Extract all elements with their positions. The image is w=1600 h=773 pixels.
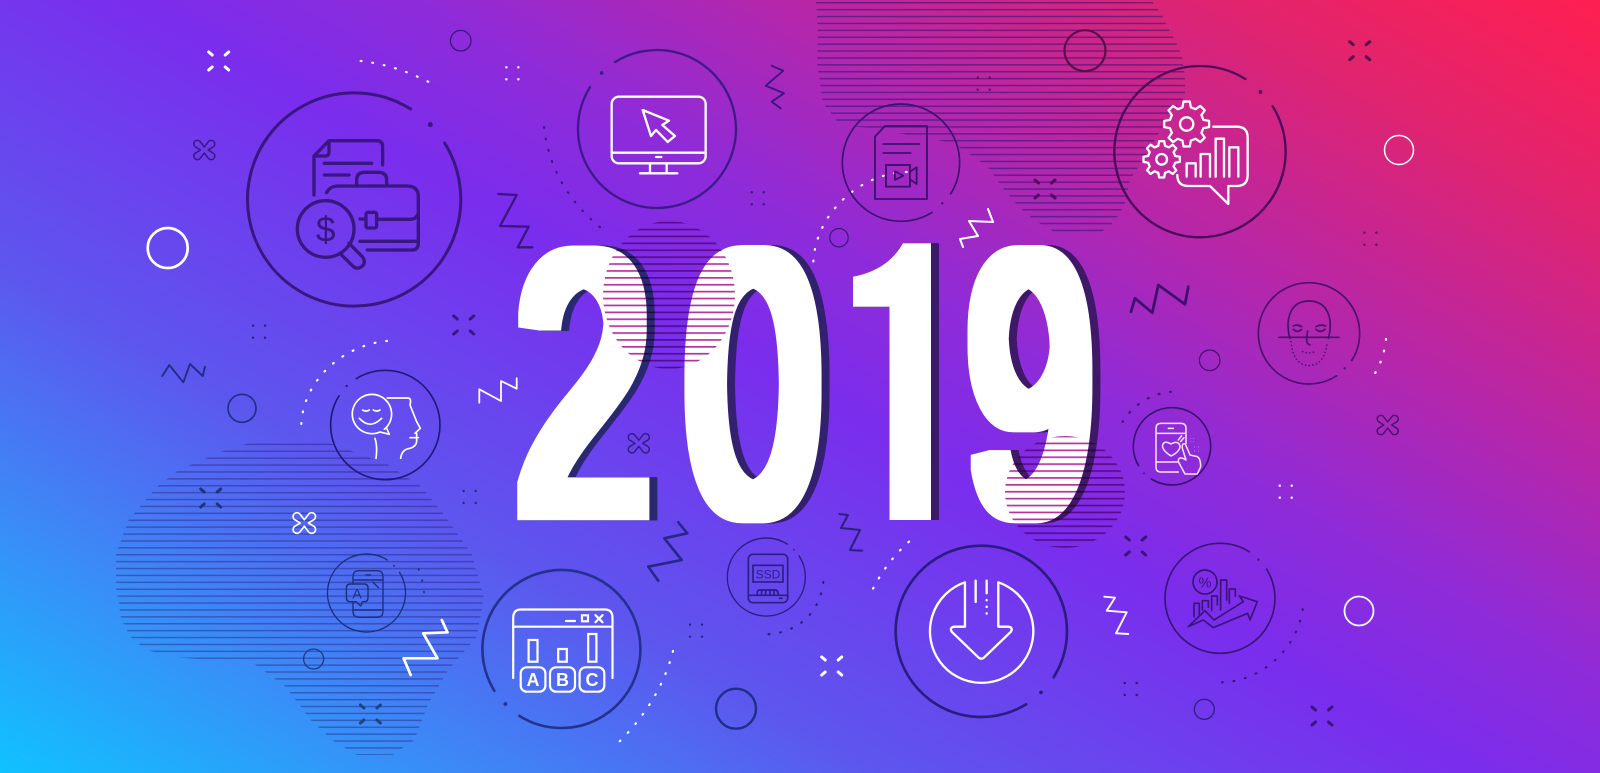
scattered marks: small x <box>253 67 1376 695</box>
icon: SSD drive: SSD <box>756 568 781 582</box>
hatched blob: top right <box>816 0 1185 235</box>
icon: smiling speech bubble and head profile <box>310 350 461 500</box>
icon: ABC window chart: B <box>556 670 569 690</box>
icon: briefcase with dollar magnifier <box>207 53 501 346</box>
icon: ABC window chart <box>453 540 670 758</box>
icon: face scan <box>1239 263 1379 403</box>
big numerals 2019 <box>517 243 1100 524</box>
dotted arcs <box>301 61 1386 744</box>
icon: gears and bar chart bubble <box>1082 34 1318 270</box>
scattered marks: big x <box>201 42 1370 725</box>
scattered small circles <box>148 30 1414 729</box>
digit 1 <box>853 243 939 520</box>
zigzag decorations <box>162 66 1188 675</box>
digit 2: 2 <box>515 176 651 592</box>
scattered marks: clover crosses <box>194 140 1398 533</box>
icon: phone translate <box>313 539 420 647</box>
icon: SSD drive <box>712 523 820 631</box>
icon: ABC window chart: C <box>586 670 598 690</box>
icon: phone with heart and pointing hand <box>1119 394 1225 499</box>
digit 1: 1 <box>838 176 974 592</box>
digit 0: 0 <box>685 176 821 592</box>
icon: monitor with cursor <box>548 20 766 238</box>
hatch overlay on 2 and 0 <box>603 221 735 369</box>
hatched blob: lower left <box>116 443 484 755</box>
icon: percent growth chart <box>1144 523 1296 674</box>
icon: percent growth chart: % <box>1198 575 1212 591</box>
icon: briefcase with dollar magnifier: $ <box>316 210 336 249</box>
icon: ABC window chart: A <box>526 670 540 690</box>
icon: video file <box>820 82 982 243</box>
icon: phone translate: A <box>352 586 362 602</box>
hatch overlay on 9 <box>1005 436 1125 548</box>
digit 9: 9 <box>967 177 1093 592</box>
icon: download arrow in circle <box>863 513 1099 749</box>
